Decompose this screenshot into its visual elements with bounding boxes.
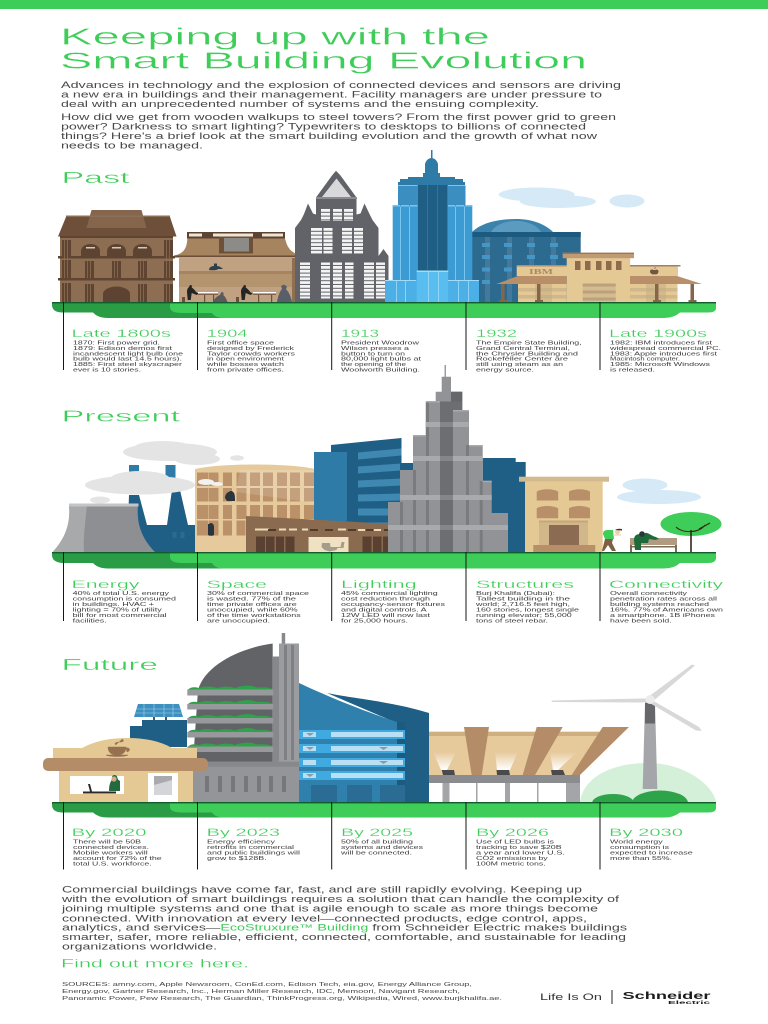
building: curved blue glass tower — [299, 683, 429, 802]
panel: present — [52, 365, 724, 624]
clouds: present — [617, 478, 701, 504]
building: Empire State blue tower — [385, 150, 479, 302]
column: connectivity: 16%. 77% of Americans own — [610, 607, 723, 613]
column: late 1800s: incandescent light bulb (one — [73, 351, 183, 357]
chimneys and power plant — [127, 465, 203, 552]
sources: SOURCES: amny.com, Apple Newsroom, ConEd.com, Edison Tech, eia.gov, Energy Alliance Group, — [62, 982, 473, 988]
icon: apple logo — [650, 267, 659, 274]
column: lighting: and digital controls. A — [341, 607, 427, 613]
column: 1913 — [341, 328, 422, 374]
column: 1904: First office space — [207, 340, 274, 346]
closing paragraph: joining multiple systems and one that is agile enough to scale as more things become — [60, 904, 598, 914]
column: by 2030: expected to increase — [610, 850, 693, 856]
top green bar — [0, 0, 768, 9]
column: energy: lighting = 70% of utility — [73, 607, 162, 613]
column: late 1900s: 1985: Microsoft Windows — [610, 362, 710, 368]
column: late 1900s: is released. — [610, 368, 656, 374]
intro text: needs to be managed. — [61, 140, 203, 150]
column: connectivity: a smartphone. 1B iPhones — [610, 613, 715, 619]
heading: past: Past — [62, 170, 131, 187]
column: energy: bill for most commercial — [73, 613, 167, 619]
column: structures: Structures — [476, 579, 575, 591]
column: by 2026: 100M metric tons. — [476, 862, 546, 868]
column: 1913: Woolworth Building. — [341, 368, 421, 374]
wind turbine — [552, 664, 702, 789]
building: tan townhouse — [519, 477, 609, 552]
title: Smart Building Evolution — [60, 48, 587, 74]
title: Keeping up with the — [60, 24, 490, 50]
people and bench — [602, 529, 677, 552]
building: timber canopy — [429, 727, 629, 802]
column: 1904: Taylor crowds workers — [207, 351, 295, 357]
column: late 1900s: Macintosh computer. — [610, 357, 681, 363]
panel: past — [52, 150, 722, 374]
column: 1932: Grand Central Terminal, — [476, 346, 571, 352]
column: by 2020: Mobile workers will — [73, 850, 148, 856]
column: 1932: energy source. — [476, 368, 535, 374]
building: dark block with solar panel — [130, 704, 187, 747]
column: structures — [474, 579, 579, 624]
column: by 2020: connected devices. — [73, 845, 150, 851]
column: 1913: Wilson presses a — [341, 346, 410, 352]
heading: present: Present — [62, 409, 181, 426]
column: connectivity: Connectivity — [609, 579, 724, 591]
column: by 2026: Use of LED bulbs is — [476, 840, 554, 846]
column: 1904: in open environment — [207, 357, 285, 363]
column: by 2023: By 2023 — [207, 827, 280, 839]
column: energy — [72, 579, 176, 624]
icon: boss figure — [209, 264, 223, 270]
building: low brown block — [246, 516, 413, 552]
logo: Life Is On Schneider Electric: Life Is On — [540, 992, 602, 1003]
column: space — [207, 579, 309, 624]
building: dome blue block — [472, 219, 581, 302]
column: by 2023: and public buildings will — [207, 850, 300, 856]
building: tan glass office — [195, 464, 315, 552]
closing paragraph: organizations worldwide. — [62, 942, 217, 952]
column: 1913: 1913 — [341, 328, 379, 340]
column: 1932: the Chrysler Building and — [476, 351, 578, 357]
column: by 2023: retrofits in commercial — [207, 845, 294, 851]
closing paragraph: connected. With innovation at every level—connected products, edge control, apps, — [62, 913, 587, 923]
ground: future — [52, 802, 716, 818]
column: 1932: still using steam as an — [476, 362, 563, 368]
heading: future: Future — [62, 657, 158, 674]
timeline dividers — [64, 302, 600, 370]
timeline dividers — [64, 802, 600, 870]
column: by 2023 — [207, 827, 300, 862]
column: connectivity: Overall connectivity — [610, 591, 687, 597]
sources: Energy.gov, Gartner Research, Inc., Herman Miller Research, IDC, Memoori, Navigant Research, — [62, 989, 461, 995]
column: space: of the time workstations — [207, 613, 301, 619]
building: Burj Khalifa gray tower — [388, 365, 508, 552]
intro text: power? Darkness to smart lighting? Typewriters to desktops to billions of connected — [61, 122, 586, 132]
column: by 2026 — [476, 827, 566, 868]
closing paragraph: smarter, safer, more reliable, efficient, connected, comfortable, and sustainable for leading — [62, 932, 626, 942]
column: energy: facilities. — [73, 618, 107, 624]
column: by 2030: World energy — [610, 840, 663, 846]
column: space: Space — [207, 579, 267, 591]
intro text — [61, 80, 621, 150]
ground: present — [52, 552, 716, 568]
column: late 1800s: 1879: Edison demos first — [73, 346, 173, 352]
column: 1904 — [205, 328, 295, 374]
intro text: How did we get from wooden walkups to steel towers? From the first power grid to green — [61, 112, 616, 122]
column: space: is wasted. 77% of the — [207, 596, 296, 602]
column: by 2020: account for 72% of the — [73, 856, 162, 862]
intro text: things? Here's a brief look at the smart building evolution and the growth of what now — [61, 131, 598, 141]
column: energy: consumption is consumed — [73, 596, 176, 602]
column: space: are unoccupied. — [207, 618, 271, 624]
column: by 2030: consumption is — [610, 845, 669, 851]
building: brown 1800s brick — [58, 210, 176, 302]
column: by 2020: By 2020 — [72, 827, 146, 839]
sources: Panoramic Power, Pew Research, The Guardian, ThinkProgress.org, Wikipedia, Wired, www.burjkhalifa.ae. — [62, 996, 503, 1002]
column: by 2026: tracking to save $20B — [476, 845, 562, 851]
building: 1904 office — [174, 232, 302, 302]
column: structures: tons of steel rebar. — [476, 618, 549, 624]
column: by 2030: more than 55%. — [610, 856, 673, 862]
column: lighting: cost reduction through — [341, 596, 430, 602]
column: 1913: button to turn on — [341, 351, 405, 357]
column: by 2025: 50% of all building — [341, 840, 413, 846]
timeline dividers — [64, 552, 600, 621]
column: lighting: 45% commercial lighting — [341, 591, 438, 597]
logo: Life Is On Schneider Electric: Electric — [668, 1000, 711, 1006]
column: lighting: 12W LED will now last — [341, 613, 431, 619]
column: connectivity: building systems reached — [610, 602, 709, 608]
column: late 1900s: Late 1900s — [609, 328, 708, 340]
cooling tower — [53, 504, 155, 552]
building: teal rear tower — [483, 458, 526, 552]
column: 1904: from private offices. — [207, 368, 285, 374]
column: late 1800s: Late 1800s — [72, 328, 172, 340]
closing paragraph: Commercial buildings have come far, fast, and are still rapidly evolving. Keeping up — [62, 884, 582, 894]
intro text: a new era in buildings and their management. Facility managers are under pressure to — [61, 90, 602, 100]
column: by 2023: grow to $128B. — [207, 856, 267, 862]
office workers at desks — [182, 284, 292, 302]
building: coffee shop — [43, 738, 208, 802]
column: late 1900s: 1983: Apple introduces first — [610, 351, 718, 357]
column: late 1800s: bulb would last 14.5 hours). — [73, 357, 183, 363]
intro text: deal with an unprecedented number of systems and the ensuing complexity. — [61, 99, 539, 109]
logo: IBM: IBM — [529, 267, 553, 276]
building: teal skyscraper — [314, 438, 414, 552]
closing paragraph: with the evolution of smart buildings requires a solution that can handle the complexity of — [60, 894, 620, 904]
column: lighting — [341, 579, 445, 624]
building: IBM and Apple tan stores — [496, 253, 702, 302]
building: green terraced tower — [187, 633, 299, 802]
column: structures: Burj Khalifa (Dubai): — [476, 591, 556, 597]
column: structures: world; 2,716.5 feet high, — [474, 602, 571, 608]
panel: future — [43, 633, 716, 870]
icon: coffee cup — [106, 739, 130, 756]
title — [60, 24, 587, 74]
column: lighting: Lighting — [341, 579, 417, 591]
smoke clouds — [85, 441, 244, 504]
column: by 2030 — [609, 827, 693, 862]
intro text: Advances in technology and the explosion of connected devices and sensors are driving — [61, 80, 621, 90]
hill — [580, 763, 716, 802]
call to action link: Find out more here. — [61, 956, 249, 970]
column: lighting: occupancy-sensor fixtures — [341, 602, 445, 608]
column: late 1800s: 1870: First power grid. — [73, 340, 161, 346]
column: connectivity: have been sold. — [610, 618, 672, 624]
column: 1932: Rockefeller Center are — [476, 357, 568, 363]
column: by 2020: There will be 50B — [73, 840, 141, 846]
logo: Life Is On Schneider Electric: Schneider — [622, 990, 710, 1002]
column: space: 30% of commercial space — [207, 591, 309, 597]
column: lighting: for 25,000 hours. — [341, 618, 409, 624]
column: late 1800s: ever is 10 stories. — [73, 368, 142, 374]
column: connectivity — [609, 579, 724, 624]
tree — [660, 512, 722, 552]
column: 1904: 1904 — [207, 328, 248, 340]
column: energy: in buildings. HVAC + — [73, 602, 155, 608]
column: by 2025 — [339, 827, 423, 856]
sources — [62, 982, 503, 1002]
column: by 2020: total U.S. workforce. — [73, 862, 152, 868]
column: connectivity: penetration rates across all — [610, 596, 717, 602]
column: energy: Energy — [72, 579, 140, 591]
column: energy: 40% of total U.S. energy — [73, 591, 169, 597]
icon: people in window — [322, 542, 344, 552]
column: late 1900s: 1982: IBM introduces first — [610, 340, 713, 346]
column: by 2026: a year and lower U.S. — [476, 850, 566, 856]
bushes — [592, 790, 688, 816]
column: space: unoccupied, while 60% — [207, 607, 298, 613]
column: 1913: President Woodrow — [341, 340, 420, 346]
column: structures: running elevator; 55,000 — [476, 613, 572, 619]
clouds — [499, 188, 644, 208]
column: by 2020 — [72, 827, 162, 868]
column: 1913: 80,000 light bulbs at — [341, 357, 422, 363]
building: 1913 Woolworth gray tower — [295, 171, 388, 302]
remote worker at laptop — [83, 784, 116, 794]
column: 1932 — [476, 328, 582, 374]
column: by 2026: CO2 emissions by — [476, 856, 548, 862]
column: 1904: designed by Frederick — [207, 346, 294, 352]
column: by 2026: By 2026 — [476, 827, 549, 839]
closing paragraph — [60, 884, 628, 952]
column: 1932: The Empire State Building, — [476, 340, 582, 346]
column: 1913: the opening of the — [341, 362, 406, 368]
column: structures: Tallest building in the — [476, 596, 570, 602]
column: space: time private offices are — [207, 602, 297, 608]
column: by 2025: systems and devices — [341, 845, 423, 851]
column: by 2025: will be connected. — [339, 850, 413, 856]
logo: Life Is On Schneider Electric — [540, 990, 711, 1006]
closing paragraph: analytics, and services— EcoStruxure™ Building from Schneider Electric makes buildings — [62, 923, 628, 933]
column: late 1900s: widespread commercial PC. — [608, 346, 722, 352]
column: 1932: 1932 — [476, 328, 517, 340]
ground: past — [52, 302, 716, 318]
column: by 2025: By 2025 — [341, 827, 413, 839]
column: by 2030: By 2030 — [609, 827, 683, 839]
column: late 1900s — [608, 328, 722, 374]
column: by 2023: Energy efficiency — [207, 840, 275, 846]
column: late 1800s — [72, 328, 183, 374]
column: structures: 160 stories, longest single — [476, 607, 579, 613]
column: 1904: while bosses watch — [205, 362, 284, 368]
column: late 1800s: 1885: First steel skyscraper — [73, 362, 182, 368]
